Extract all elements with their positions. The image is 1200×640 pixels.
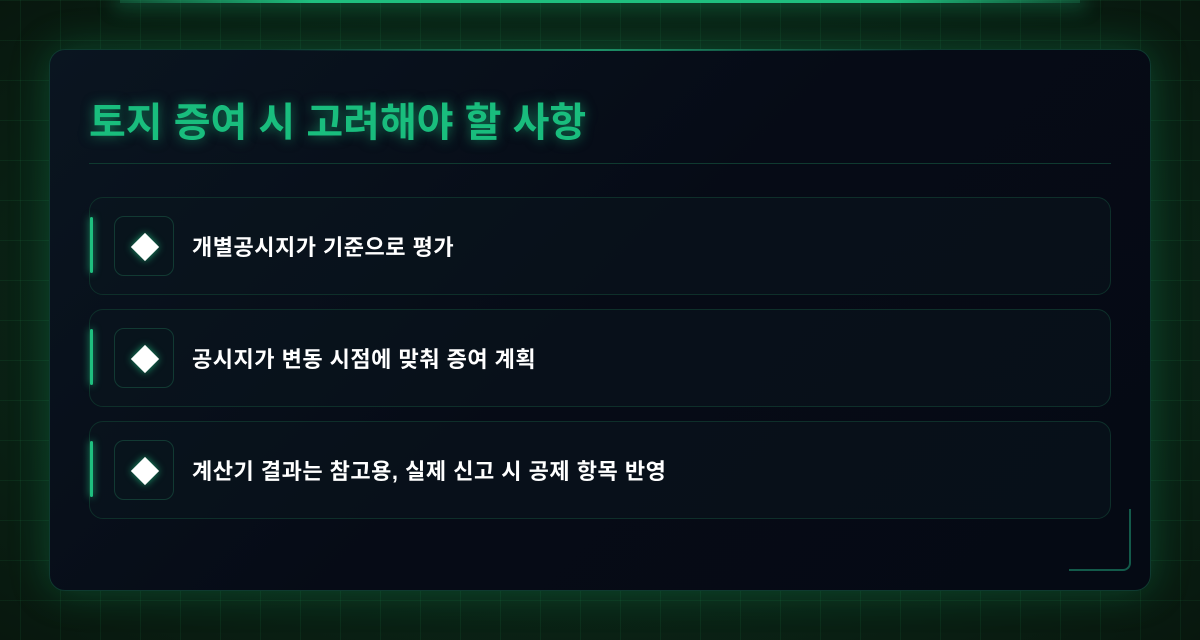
title: 토지 증여 시 고려해야 할 사항	[89, 101, 586, 145]
icon: diamond	[114, 216, 174, 276]
corner bracket	[1069, 509, 1131, 571]
text 3: 계산기 결과는 참고용, 실제 신고 시 공제 항목 반영	[192, 459, 666, 484]
text 1: 개별공시지가 기준으로 평가	[192, 235, 454, 260]
panel: main card	[49, 49, 1151, 591]
icon: diamond	[114, 328, 174, 388]
icon: diamond	[114, 440, 174, 500]
item 2	[89, 309, 1111, 407]
item 3	[89, 421, 1111, 519]
text 2: 공시지가 변동 시점에 맞춰 증여 계획	[192, 347, 536, 372]
item 1	[89, 197, 1111, 295]
